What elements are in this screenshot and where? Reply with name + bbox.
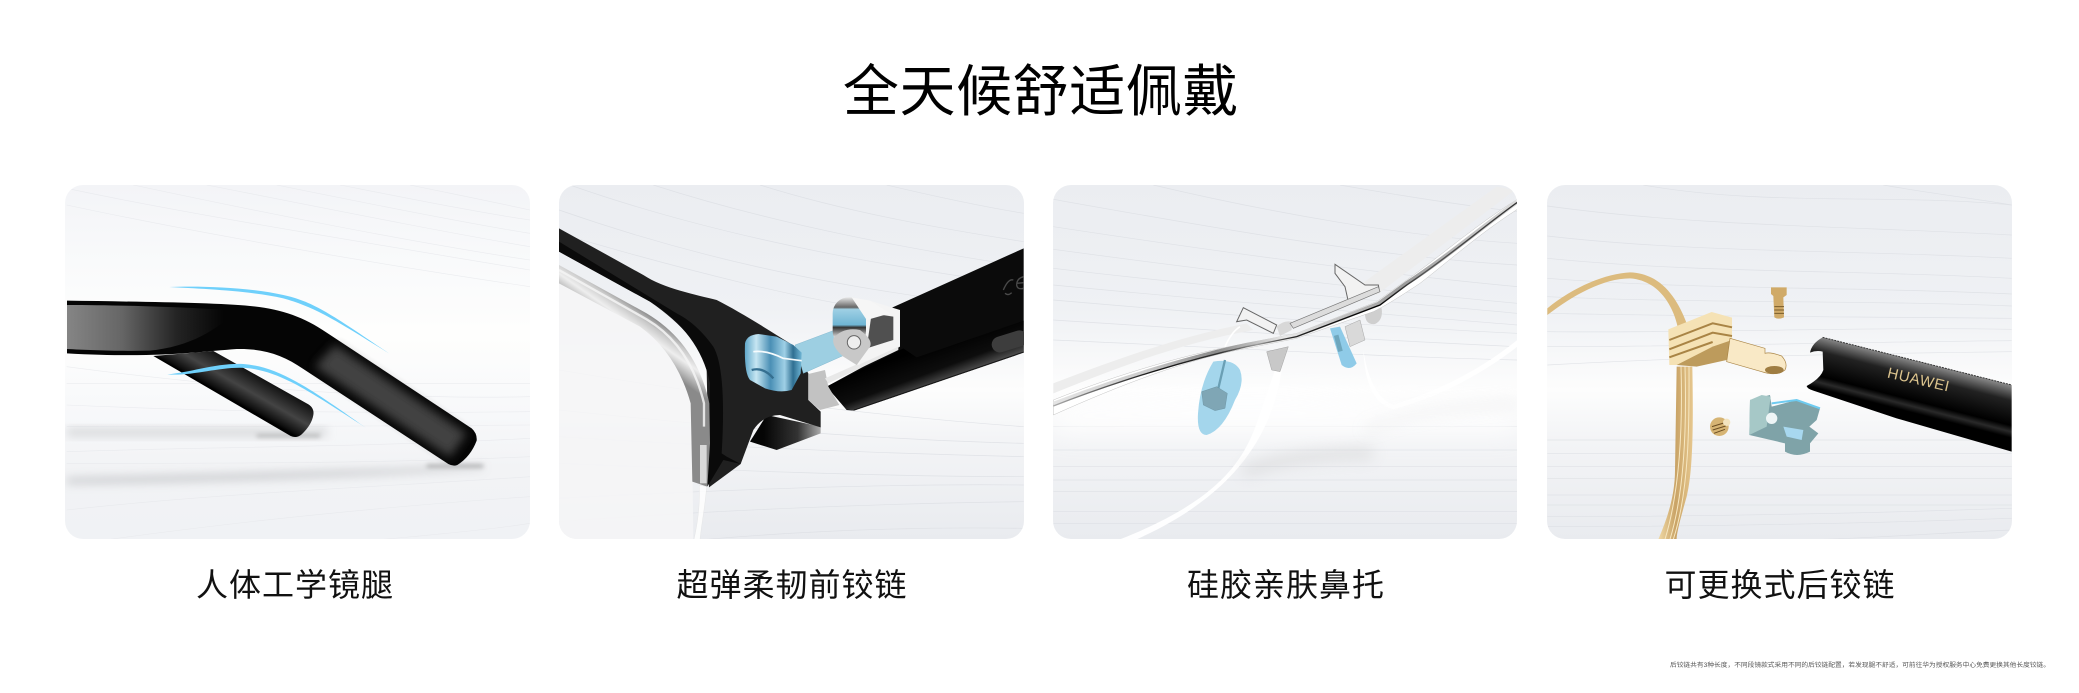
panel: replaceable rear hinge	[1547, 185, 2012, 539]
caption: nose pads: 硅胶亲肤鼻托	[1187, 567, 1385, 603]
black temple with logo	[1807, 337, 2012, 452]
steel hinge barrel	[832, 298, 884, 365]
blue hinge clip	[745, 329, 848, 391]
clear lens rim	[559, 265, 710, 487]
caption: rear hinge: 可更换式后铰链	[1664, 567, 1896, 603]
white highlight band	[1054, 426, 1517, 427]
front temple arm	[67, 301, 477, 466]
left nose pad	[1198, 327, 1288, 435]
blue hinge part	[1749, 395, 1820, 455]
panel: front hinge	[559, 185, 1029, 539]
background lines	[1053, 185, 1517, 523]
rear temple band	[1054, 206, 1491, 393]
gold hinge block	[1668, 312, 1786, 374]
right nose pad	[1330, 307, 1382, 368]
blue airflow lines	[167, 287, 389, 428]
footnote: 后铰链共有3种长度，不同段镜款式采用不同的后铰链配置，若发现腿不舒适，可前往华为授权服务中心免费更换其他长度铰链。	[1670, 661, 2050, 669]
shadow under temples	[67, 428, 483, 483]
eyeglass lens tint	[559, 370, 693, 539]
main wire	[1053, 199, 1517, 415]
lens	[1122, 426, 1264, 539]
gold frame	[1547, 272, 1693, 539]
panel: silicone nose pads	[1053, 185, 1517, 539]
gold screws	[1710, 287, 1787, 436]
metal hinge base	[808, 370, 839, 410]
caption: front hinge: 超弹柔韧前铰链	[676, 567, 908, 603]
background lines	[1547, 185, 2012, 539]
background lines	[559, 185, 1024, 539]
background lines	[67, 185, 530, 539]
temple arm	[827, 248, 1029, 411]
rear frame pocket	[750, 415, 821, 450]
right bridge clip	[1335, 264, 1379, 302]
black frame front	[559, 228, 821, 487]
lower lens rim	[694, 485, 707, 539]
back temple arm	[153, 351, 314, 437]
panel: ergonomic temple	[65, 185, 530, 539]
bridge top bar	[1290, 287, 1380, 328]
left bridge clip	[1237, 308, 1277, 333]
black temple with logo: HUAWEI	[1886, 365, 1951, 395]
caption: ergonomic temple: 人体工学镜腿	[196, 567, 394, 603]
title: 全天候舒适佩戴	[843, 60, 1239, 123]
